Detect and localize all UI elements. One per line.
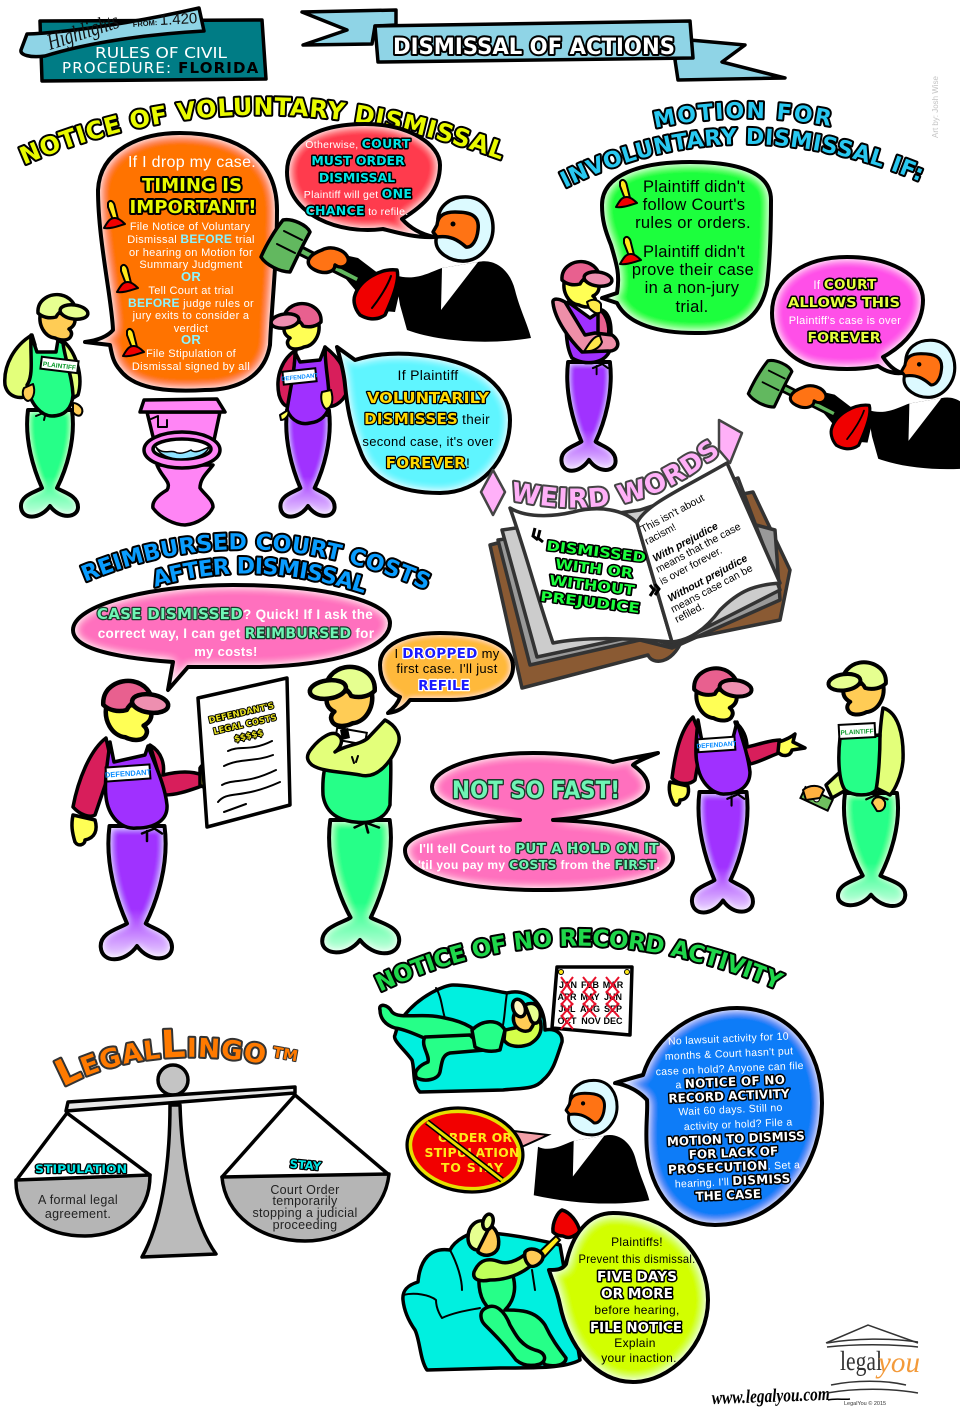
illustration: open book with definitions: This isn't about — [639, 492, 707, 536]
illustration: defendant's legal costs document — [198, 678, 290, 827]
illustration: balance scale with definitions: stopping a judicial — [252, 1206, 358, 1220]
panel: orange speech bubble: Summary Judgment — [139, 259, 243, 271]
logo: legal you: legal — [840, 1346, 882, 1376]
panel: orange speech bubble: Tell Court at trial — [148, 285, 234, 297]
logo: legal you: you — [875, 1346, 920, 1379]
panel: orange-yellow speech bubble: I DROPPED my — [394, 646, 500, 662]
heading: legal lingo: TM — [271, 1043, 299, 1065]
figure: defendant hands on hips — [270, 304, 348, 517]
panel: green speech bubble: in a non-jury — [645, 279, 740, 297]
title ribbon: dismissal of actions — [302, 10, 785, 80]
illustration: open book with definitions: refiled. — [673, 600, 706, 626]
panel: blue speech bubble: PROSECUTION. Set a — [668, 1157, 800, 1177]
panel: cyan speech bubble: VOLUNTARILY — [367, 389, 490, 407]
illustration: open book with definitions: PREJUDICE — [539, 589, 641, 617]
heading: legal lingo: LEGALLINGO — [52, 1028, 267, 1088]
heading: motion for involuntary dismissal: INVOLUNTARY DISMISSAL IF: — [558, 126, 924, 190]
panel: lime speech bubble: Prevent this dismissal. — [578, 1252, 696, 1266]
panel: lime speech bubble: before hearing, — [594, 1303, 680, 1317]
panel: green speech bubble — [602, 162, 771, 333]
panel: green speech bubble: rules or orders. — [635, 214, 751, 232]
panel: orange speech bubble: If I drop my case. — [128, 154, 256, 171]
header badge: rules of civil procedure florida: PROCEDURE: FLORIDA — [62, 59, 259, 77]
illustration: calendar with crossed out months: MAR — [603, 980, 624, 990]
logo: legal you — [826, 1325, 920, 1407]
figure: plaintiff hands on hips — [5, 295, 89, 517]
panel: cyan speech bubble: DISMISSES their — [364, 410, 490, 428]
header badge: rules of civil procedure florida: FROM: — [132, 18, 158, 29]
heading: motion for involuntary dismissal: MOTION FOR — [652, 100, 832, 130]
panel: lime speech bubble — [549, 1213, 708, 1382]
panel: blue speech bubble: THE CASE — [695, 1187, 761, 1204]
panel: orange speech bubble: File Stipulation of — [146, 348, 237, 360]
panel: orange speech bubble: IMPORTANT! — [130, 197, 256, 218]
figure: defendant thinking — [553, 262, 618, 471]
panel: pink speech bubble — [73, 585, 390, 690]
panel: blue speech bubble: months & Court hasn't put — [665, 1045, 794, 1063]
heading: reimbursed court costs after dismissal: AFTER DISMISSAL — [153, 555, 366, 596]
illustration: calendar with crossed out months: AUG — [580, 1004, 600, 1014]
callout: crossed out order or stipulation to stay — [402, 1101, 548, 1199]
figure: judge with gavel, right — [748, 340, 960, 472]
illustration: calendar with crossed out months: OCT — [558, 1016, 577, 1026]
panel: orange speech bubble: OR — [181, 332, 201, 347]
illustration: calendar with crossed out months: NOV — [581, 1016, 601, 1026]
illustration: open book with definitions: WITH OR — [554, 556, 634, 582]
illustration: calendar with crossed out months: JUL — [558, 1004, 576, 1014]
panel: green speech bubble: Plaintiff didn't — [643, 178, 745, 196]
illustration: calendar with crossed out months: JUN — [604, 992, 622, 1002]
panel: orange speech bubble: Dismissal signed by all — [132, 361, 250, 373]
panel: orange-yellow speech bubble — [380, 633, 513, 713]
panel: blue speech bubble: hearing. I'll DISMISS — [674, 1172, 791, 1191]
panel: cyan speech bubble: FOREVER! — [386, 454, 470, 472]
panel: pink speech bubble: CASE DISMISSED? Quick! If I ask the — [97, 605, 373, 623]
panel: orange speech bubble: TIMING IS — [142, 175, 242, 196]
panel: red speech bubble: DISMISSAL — [319, 170, 395, 185]
panel: red speech bubble: Otherwise, COURT — [305, 136, 411, 151]
illustration: defendant's legal costs document: $$$$$ — [233, 728, 264, 745]
heading: weird words: WEIRD WORDS — [512, 438, 720, 510]
panel: cyan speech bubble: second case, it's over — [362, 434, 494, 449]
figure: judge, record activity — [534, 1080, 649, 1204]
panel: orange speech bubble: OR — [181, 269, 201, 284]
illustration: balance scale with definitions: agreement. — [45, 1207, 111, 1221]
illustration: calendar with crossed out months: DEC — [603, 1016, 623, 1026]
figure: judge with gavel — [261, 197, 531, 342]
figure: plaintiff holding money: PLAINTIFF — [840, 728, 874, 737]
illustration: balance scale with definitions: Court Order — [270, 1183, 340, 1197]
panel: not so fast speech bubble: NOT SO FAST! — [452, 776, 620, 804]
panel: red speech bubble — [287, 124, 440, 237]
panel: not so fast speech bubble — [405, 753, 673, 890]
figure: plaintiff holding money — [800, 662, 905, 906]
header badge: rules of civil procedure florida: Highlights — [43, 8, 122, 55]
panel: green speech bubble: follow Court's — [643, 196, 745, 214]
panel: pink speech bubble: my costs! — [194, 644, 258, 659]
heading: reimbursed court costs after dismissal: REIMBURSED COURT COSTS — [78, 531, 432, 590]
panel: magenta speech bubble: ALLOWS THIS — [788, 295, 900, 311]
panel: lime speech bubble: OR MORE — [601, 1286, 673, 1302]
illustration: calendar with crossed out months: APR — [557, 992, 577, 1002]
panel: magenta speech bubble: FOREVER — [808, 330, 881, 346]
panel: blue speech bubble: No lawsuit activity for 10 — [668, 1030, 789, 1048]
illustration: person on sofa raising plunger — [403, 1210, 580, 1370]
heading: notice of voluntary dismissal: NOTICE OF VOLUNTARY DISMISSAL — [17, 95, 504, 166]
title ribbon: dismissal of actions: DISMISSAL OF ACTIONS — [393, 35, 675, 60]
heading: weird words — [480, 418, 744, 516]
logo: legal you: LegalYou © 2015 — [844, 1400, 886, 1407]
panel: orange-yellow speech bubble: REFILE — [418, 678, 470, 694]
panel: lime speech bubble: FILE NOTICE — [590, 1320, 682, 1336]
illustration: balance scale with definitions: temporarily — [272, 1194, 338, 1208]
panel: green speech bubble: trial. — [676, 298, 708, 316]
illustration: calendar with crossed out months: SEP — [604, 1004, 622, 1014]
illustration: person asleep on cyan sofa — [380, 985, 562, 1092]
panel: blue speech bubble: case on hold? Anyone can file — [655, 1060, 804, 1078]
panel: green speech bubble: Plaintiff didn't — [643, 243, 745, 261]
panel: orange speech bubble: BEFORE judge rules or — [128, 296, 254, 310]
panel: blue speech bubble: FOR LACK OF — [688, 1144, 778, 1162]
illustration: balance scale with definitions: A formal legal — [38, 1193, 118, 1207]
illustration: open book with definitions: means case can be — [669, 562, 755, 616]
illustration: open book with definitions: DISMISSED — [546, 538, 647, 566]
figure: defendant pointing at costs — [72, 681, 223, 959]
panel: not so fast speech bubble: 'til you pay my COSTS from the FIRST. — [418, 857, 660, 872]
panel: blue speech bubble: RECORD ACTIVITY — [668, 1086, 790, 1106]
website url: www.legalyou.com — [711, 1384, 830, 1409]
panel: lime speech bubble: Plaintiffs! — [611, 1235, 663, 1249]
panel: red speech bubble: Plaintiff will get ONE — [304, 186, 412, 201]
illustration: defendant's legal costs document: LEGAL COSTS — [213, 713, 278, 737]
header badge: rules of civil procedure florida: RULES OF CIVIL — [95, 44, 228, 62]
illustration: open book with definitions: is over forever. — [658, 545, 724, 588]
panel: orange speech bubble — [85, 133, 277, 391]
panel: orange-yellow speech bubble: first case. I'll just — [396, 661, 498, 676]
panel: orange speech bubble: jury exits to consider a — [132, 310, 250, 322]
panel: green speech bubble: prove their case — [632, 261, 754, 279]
panel: orange speech bubble: verdict — [174, 323, 208, 335]
callout: crossed out order or stipulation to stay: TO STAY — [441, 1160, 504, 1175]
illustration: open book with definitions: means that the case — [654, 521, 743, 576]
illustration: calendar with crossed out months — [552, 967, 632, 1035]
panel: magenta speech bubble: If COURT — [813, 277, 877, 293]
figure: plaintiff hands on hips: PLAINTIFF — [42, 361, 76, 372]
panel: blue speech bubble: activity or hold? File a — [684, 1116, 793, 1133]
illustration: balance scale with definitions: proceeding — [273, 1218, 337, 1232]
illustration: open book with definitions: Without prejudice — [666, 552, 750, 605]
art credit: Art by: Josh Wise — [930, 76, 940, 138]
panel: blue speech bubble: Wait 60 days. Still no — [678, 1102, 783, 1118]
panel: not so fast speech bubble: I'll tell Court to PUT A HOLD ON IT — [419, 841, 659, 857]
panel: red speech bubble: CHANCE to refile. — [306, 203, 408, 218]
figure: defendant hands on hips: DEFENDANT — [281, 373, 319, 383]
panel: cyan speech bubble — [337, 347, 510, 493]
callout: crossed out order or stipulation to stay: ORDER OR — [438, 1130, 512, 1145]
panel: lime speech bubble: your inaction. — [601, 1351, 677, 1365]
illustration: balance scale with definitions — [16, 1065, 389, 1257]
illustration: balance scale with definitions: STIPULATION — [35, 1162, 127, 1176]
illustration: open book with definitions — [490, 463, 790, 688]
illustration: defendant's legal costs document: DEFENDANT'S — [208, 701, 275, 726]
illustration: calendar with crossed out months: FEB — [581, 980, 600, 990]
heading: motion for involuntary dismissal — [558, 100, 924, 190]
illustration: open book with definitions: WITHOUT — [548, 573, 637, 599]
heading: notice of no record activity: NOTICE OF NO RECORD ACTIVITY — [372, 926, 787, 994]
illustration: balance scale with definitions: STAY — [289, 1157, 322, 1173]
panel: lime speech bubble: FIVE DAYS — [597, 1269, 677, 1285]
panel: magenta speech bubble — [772, 257, 923, 373]
panel: orange speech bubble: or hearing on Motion for — [129, 247, 253, 259]
illustration: calendar with crossed out months: MAY — [580, 992, 600, 1002]
illustration: open book with definitions: With prejudice — [651, 520, 720, 565]
panel: blue speech bubble: MOTION TO DISMISS — [667, 1129, 805, 1149]
panel: pink speech bubble: correct way, I can get REIMBURSED for — [98, 626, 375, 642]
figure: defendant pointing right: DEFENDANT — [696, 741, 737, 750]
figure: defendant pointing right — [669, 668, 805, 912]
panel: blue speech bubble — [615, 1008, 822, 1225]
icon: pink toilet — [140, 399, 225, 525]
panel: magenta speech bubble: Plaintiff's case is over — [789, 315, 901, 327]
figure: defendant pointing at costs: DEFENDANT — [105, 767, 152, 780]
header badge: rules of civil procedure florida — [21, 8, 266, 81]
header badge: rules of civil procedure florida: 1.420 — [159, 10, 198, 29]
panel: orange speech bubble: File Notice of Voluntary — [130, 221, 250, 233]
illustration: calendar with crossed out months: JAN — [559, 980, 577, 990]
panel: red speech bubble: MUST ORDER — [311, 153, 405, 168]
panel: orange speech bubble: Dismissal BEFORE trial — [127, 232, 255, 246]
panel: cyan speech bubble: If Plaintiff — [398, 367, 458, 383]
panel: blue speech bubble: a NOTICE OF NO — [675, 1073, 786, 1091]
callout: crossed out order or stipulation to stay: STIPULATION — [424, 1145, 520, 1160]
panel: lime speech bubble: Explain — [614, 1336, 656, 1350]
illustration: open book with definitions: racism! — [643, 521, 678, 548]
figure: plaintiff arms crossed — [308, 667, 399, 953]
